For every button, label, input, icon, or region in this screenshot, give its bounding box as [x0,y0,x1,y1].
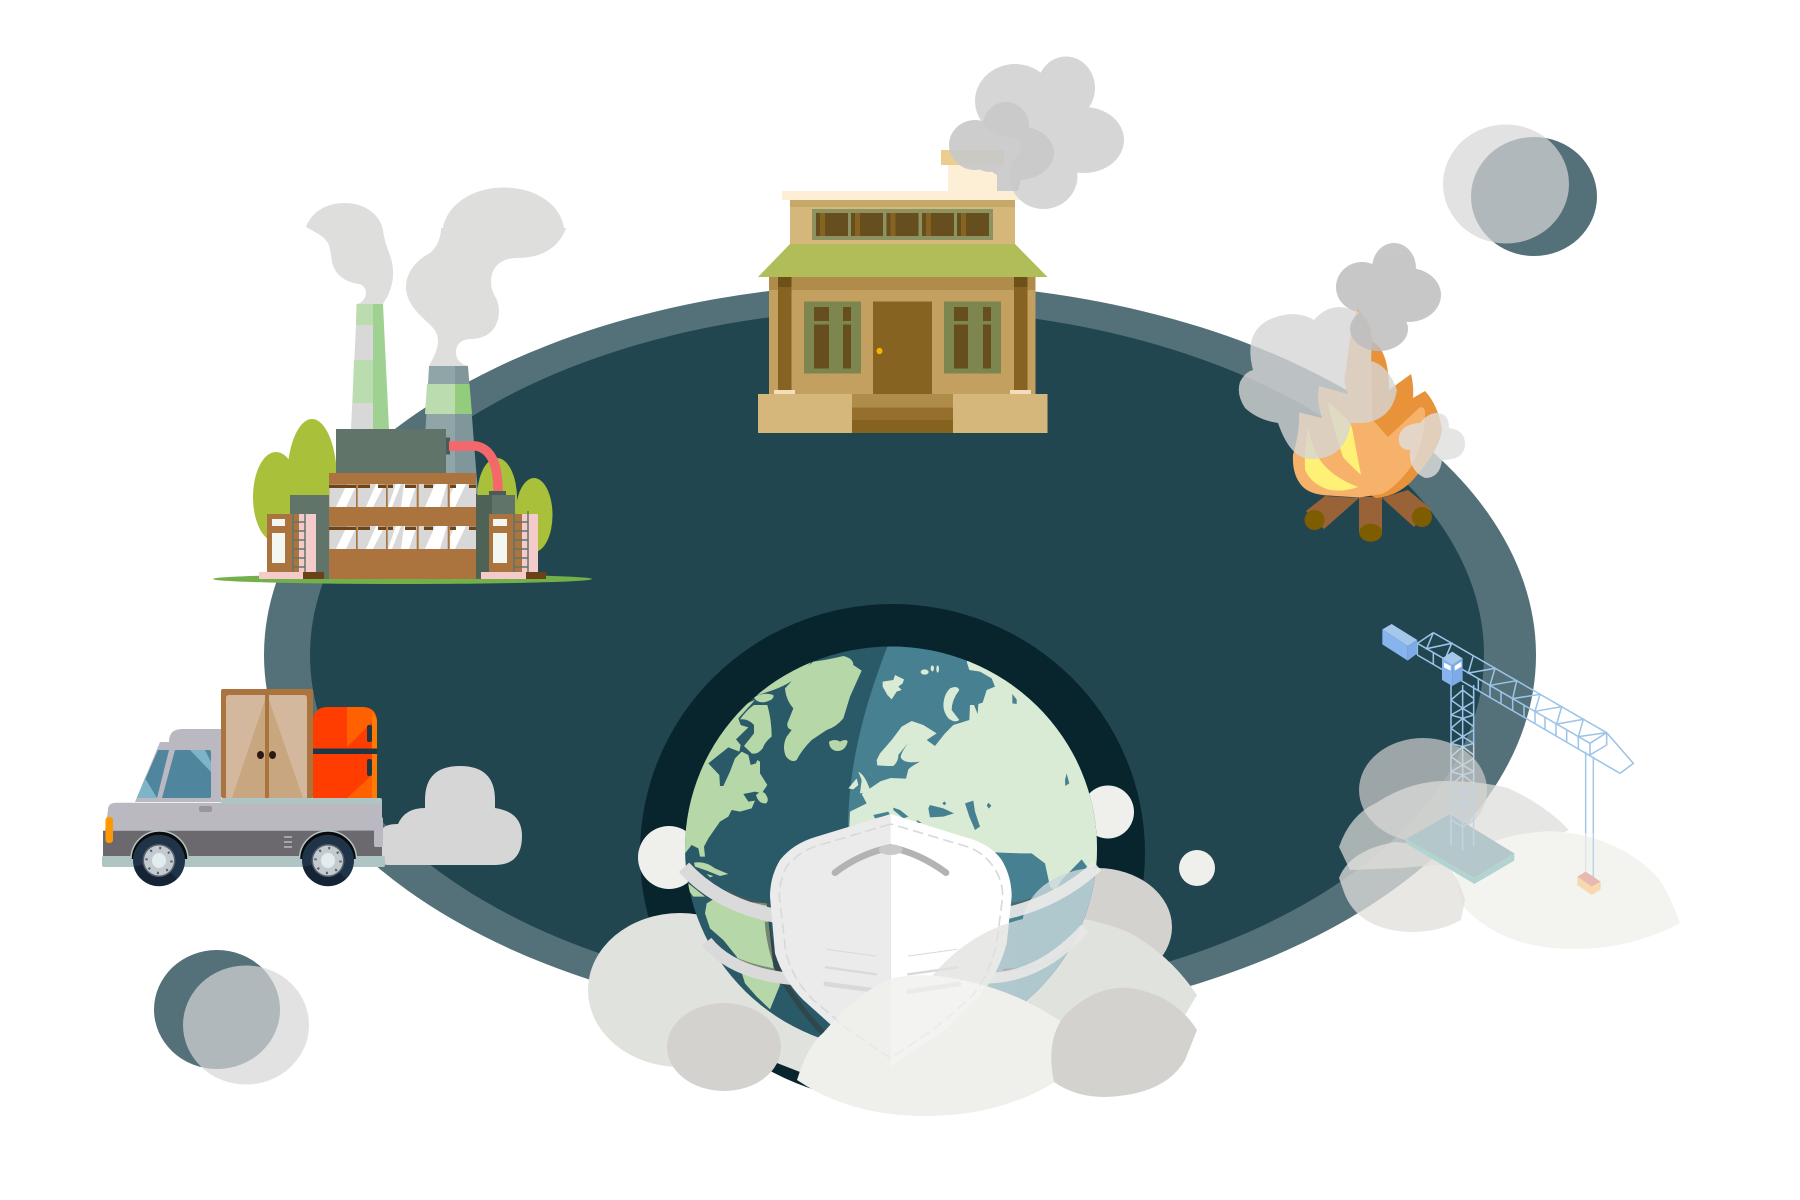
truck [102,689,522,886]
chimney: right [422,366,478,494]
crane counterweight [1382,624,1417,661]
land: Caribbean [694,862,728,877]
land: Novaya Zemlya [943,687,959,721]
mask left half [770,814,891,1067]
water: Black Sea [928,805,954,817]
land: Baffin [740,705,772,754]
haze overlay on globe [987,868,1096,1002]
land: Greenland [784,656,862,761]
crane tower lower [1451,743,1474,851]
house smoke: small cloud [949,102,1054,191]
trees [253,419,552,552]
moon: bottom left [154,950,309,1084]
connector [446,438,450,454]
background: outer oval [264,283,1536,1027]
faint mask seen through front cloud [770,814,1007,1067]
construction crane [1382,624,1633,895]
left window [804,302,861,374]
land: South America [688,883,780,1009]
land: Canada and USA [685,700,768,857]
house [758,56,1124,433]
dark ring around globe [640,604,1145,1102]
truck exhaust cloud [382,766,522,865]
crane hoist cables [1586,752,1593,880]
logs [1304,490,1432,542]
globe [685,646,1097,1038]
face mask [679,814,1102,1024]
chimney: left [351,304,389,429]
land: arctic strip [756,662,812,696]
land: Svalbard [883,675,904,699]
fire smoke: upper cloud [1336,243,1441,351]
mask pleats [826,949,959,992]
roof [758,244,1048,277]
truck body [102,798,385,867]
truck cab [135,729,221,802]
crane load [1577,872,1601,895]
house chimney [941,150,1004,191]
upper window [812,209,993,240]
bottom clouds [667,976,1197,1116]
pale cloud behind globe [915,916,1197,1070]
factory smoke: right plume [406,188,566,366]
window row: upper [329,484,476,507]
flame: main [1293,308,1425,498]
wardrobe [221,689,313,798]
land: small arctic islands [921,665,939,675]
truck wheel: rear [300,831,356,886]
flame: outer [1340,340,1442,498]
campfire [1239,243,1465,542]
mask right half [891,814,1012,1067]
crane cab [1442,652,1463,686]
right window [944,302,1001,374]
western land masses [667,656,862,857]
land: Iceland [829,740,848,751]
main building [329,473,476,579]
factory smoke: left plume [306,203,393,304]
haze over mask [933,923,1008,986]
right wing [476,491,546,579]
plinth and steps [758,394,1048,433]
crane clouds [1339,738,1680,949]
ground [213,574,592,584]
door [873,302,932,394]
house smoke: large cloud [975,56,1124,209]
top slab [782,191,1022,200]
cloud: grey front right [1051,988,1197,1097]
land: Eurasia [849,661,1097,890]
crane base slab [1406,814,1514,884]
background: inner oval [310,309,1484,1001]
strap shadow under haze edge [1003,968,1019,972]
upper storey [790,200,1015,244]
southern land masses [688,862,780,1009]
mask shadow [767,922,827,1037]
water: Mediterranean [873,808,922,823]
land: Newfoundland [756,792,768,803]
strap shadows [727,891,1035,971]
main walls [769,277,1036,394]
cloud: front pale [797,975,1070,1116]
eastern land masses [848,661,1097,890]
truck wheel: front [131,831,188,886]
land: Ellesmere island [754,694,774,702]
flame: yellow core [1305,402,1361,491]
water: Caspian and lakes [942,694,1069,830]
fire smoke: small cloud [1399,413,1465,478]
side puffs [638,786,1215,889]
bottom left cloud behind globe [588,913,880,1072]
roof box [336,429,446,473]
ocean: west [680,640,1100,1060]
fridge [313,707,377,798]
factory [213,188,592,584]
grey cloud behind globe [1022,868,1172,986]
crane tower upper [1451,685,1474,747]
window row: lower [329,526,476,549]
ocean: east [848,646,1097,1001]
globe shading [727,891,1035,1037]
moon: top right [1443,124,1597,256]
water: Baltic [869,743,920,782]
columns [774,277,1031,394]
mask nose strip [835,844,946,873]
mask stitching [779,824,1003,1058]
mask straps [684,866,1097,979]
cloud: small grey left [667,1003,781,1091]
left wing [259,495,329,579]
fire smoke: large cloud [1239,307,1397,459]
crane jib [1417,633,1633,773]
red pipe [449,446,498,491]
land: Britain and Ireland [848,772,872,793]
